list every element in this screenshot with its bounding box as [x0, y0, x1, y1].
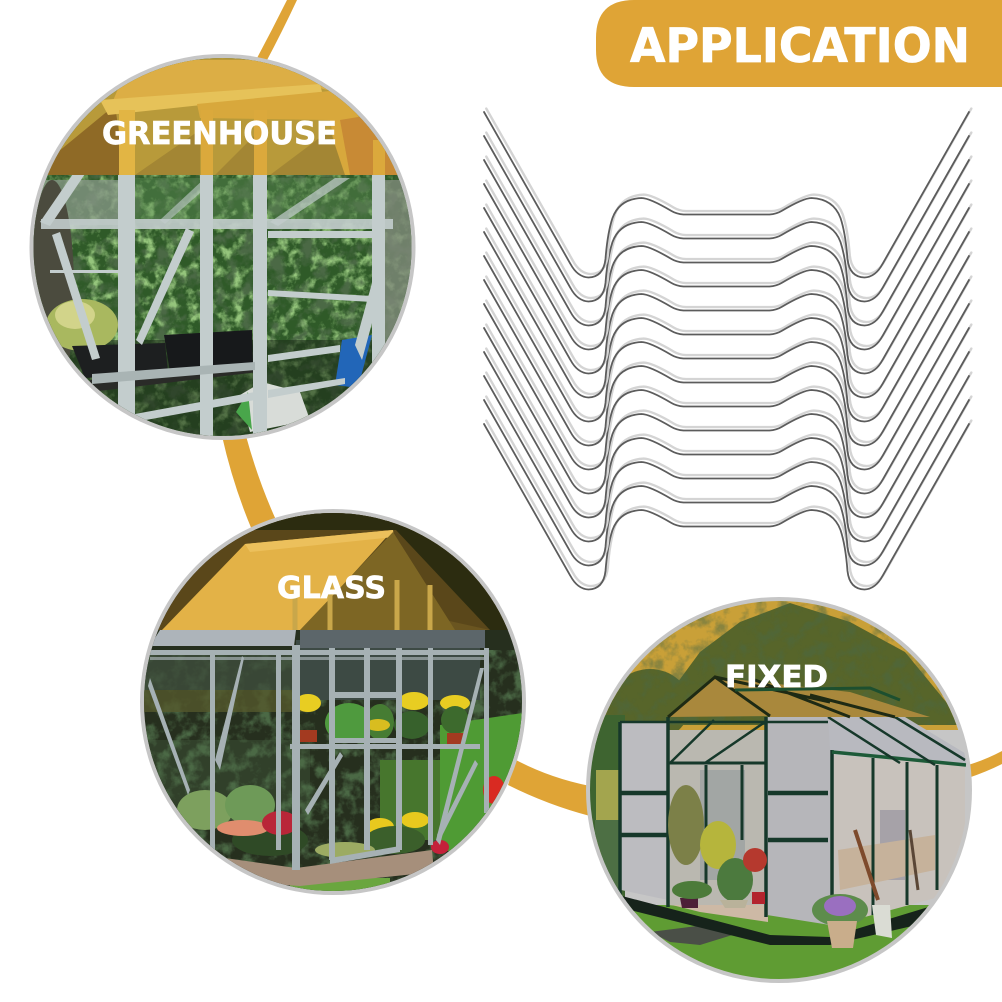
blue tarp and bag — [335, 335, 372, 388]
frame — [620, 717, 966, 930]
overlay roof scene — [48, 58, 398, 175]
title text: APPLICATION — [630, 19, 970, 74]
title banner — [596, 0, 1002, 87]
panel: fixed — [584, 595, 980, 995]
plants — [177, 790, 233, 830]
label: glass: GLASS — [277, 571, 386, 606]
photo: glass greenhouse in a garden — [140, 505, 530, 905]
product photo: stacked W-shaped wire clips — [484, 109, 971, 589]
base wall — [225, 850, 434, 886]
trees — [584, 603, 965, 751]
base — [622, 896, 928, 945]
gold gable and roof — [668, 677, 770, 717]
photo: green-framed polycarbonate greenhouse — [590, 601, 966, 979]
panel: glass — [140, 505, 530, 905]
photo: aluminium greenhouse — [30, 50, 420, 450]
panel: greenhouse — [30, 50, 420, 450]
label: fixed: FIXED — [725, 660, 828, 695]
potted plants and tools — [668, 785, 704, 865]
walls — [621, 722, 668, 900]
lawn — [440, 713, 522, 851]
grass — [629, 905, 929, 979]
overlay zone — [158, 513, 508, 630]
side band — [150, 630, 296, 646]
connecting orange curve — [222, 0, 1002, 816]
label: greenhouse: GREENHOUSE — [102, 116, 337, 152]
frame — [40, 175, 393, 436]
trays — [164, 330, 253, 372]
frame — [148, 640, 489, 870]
